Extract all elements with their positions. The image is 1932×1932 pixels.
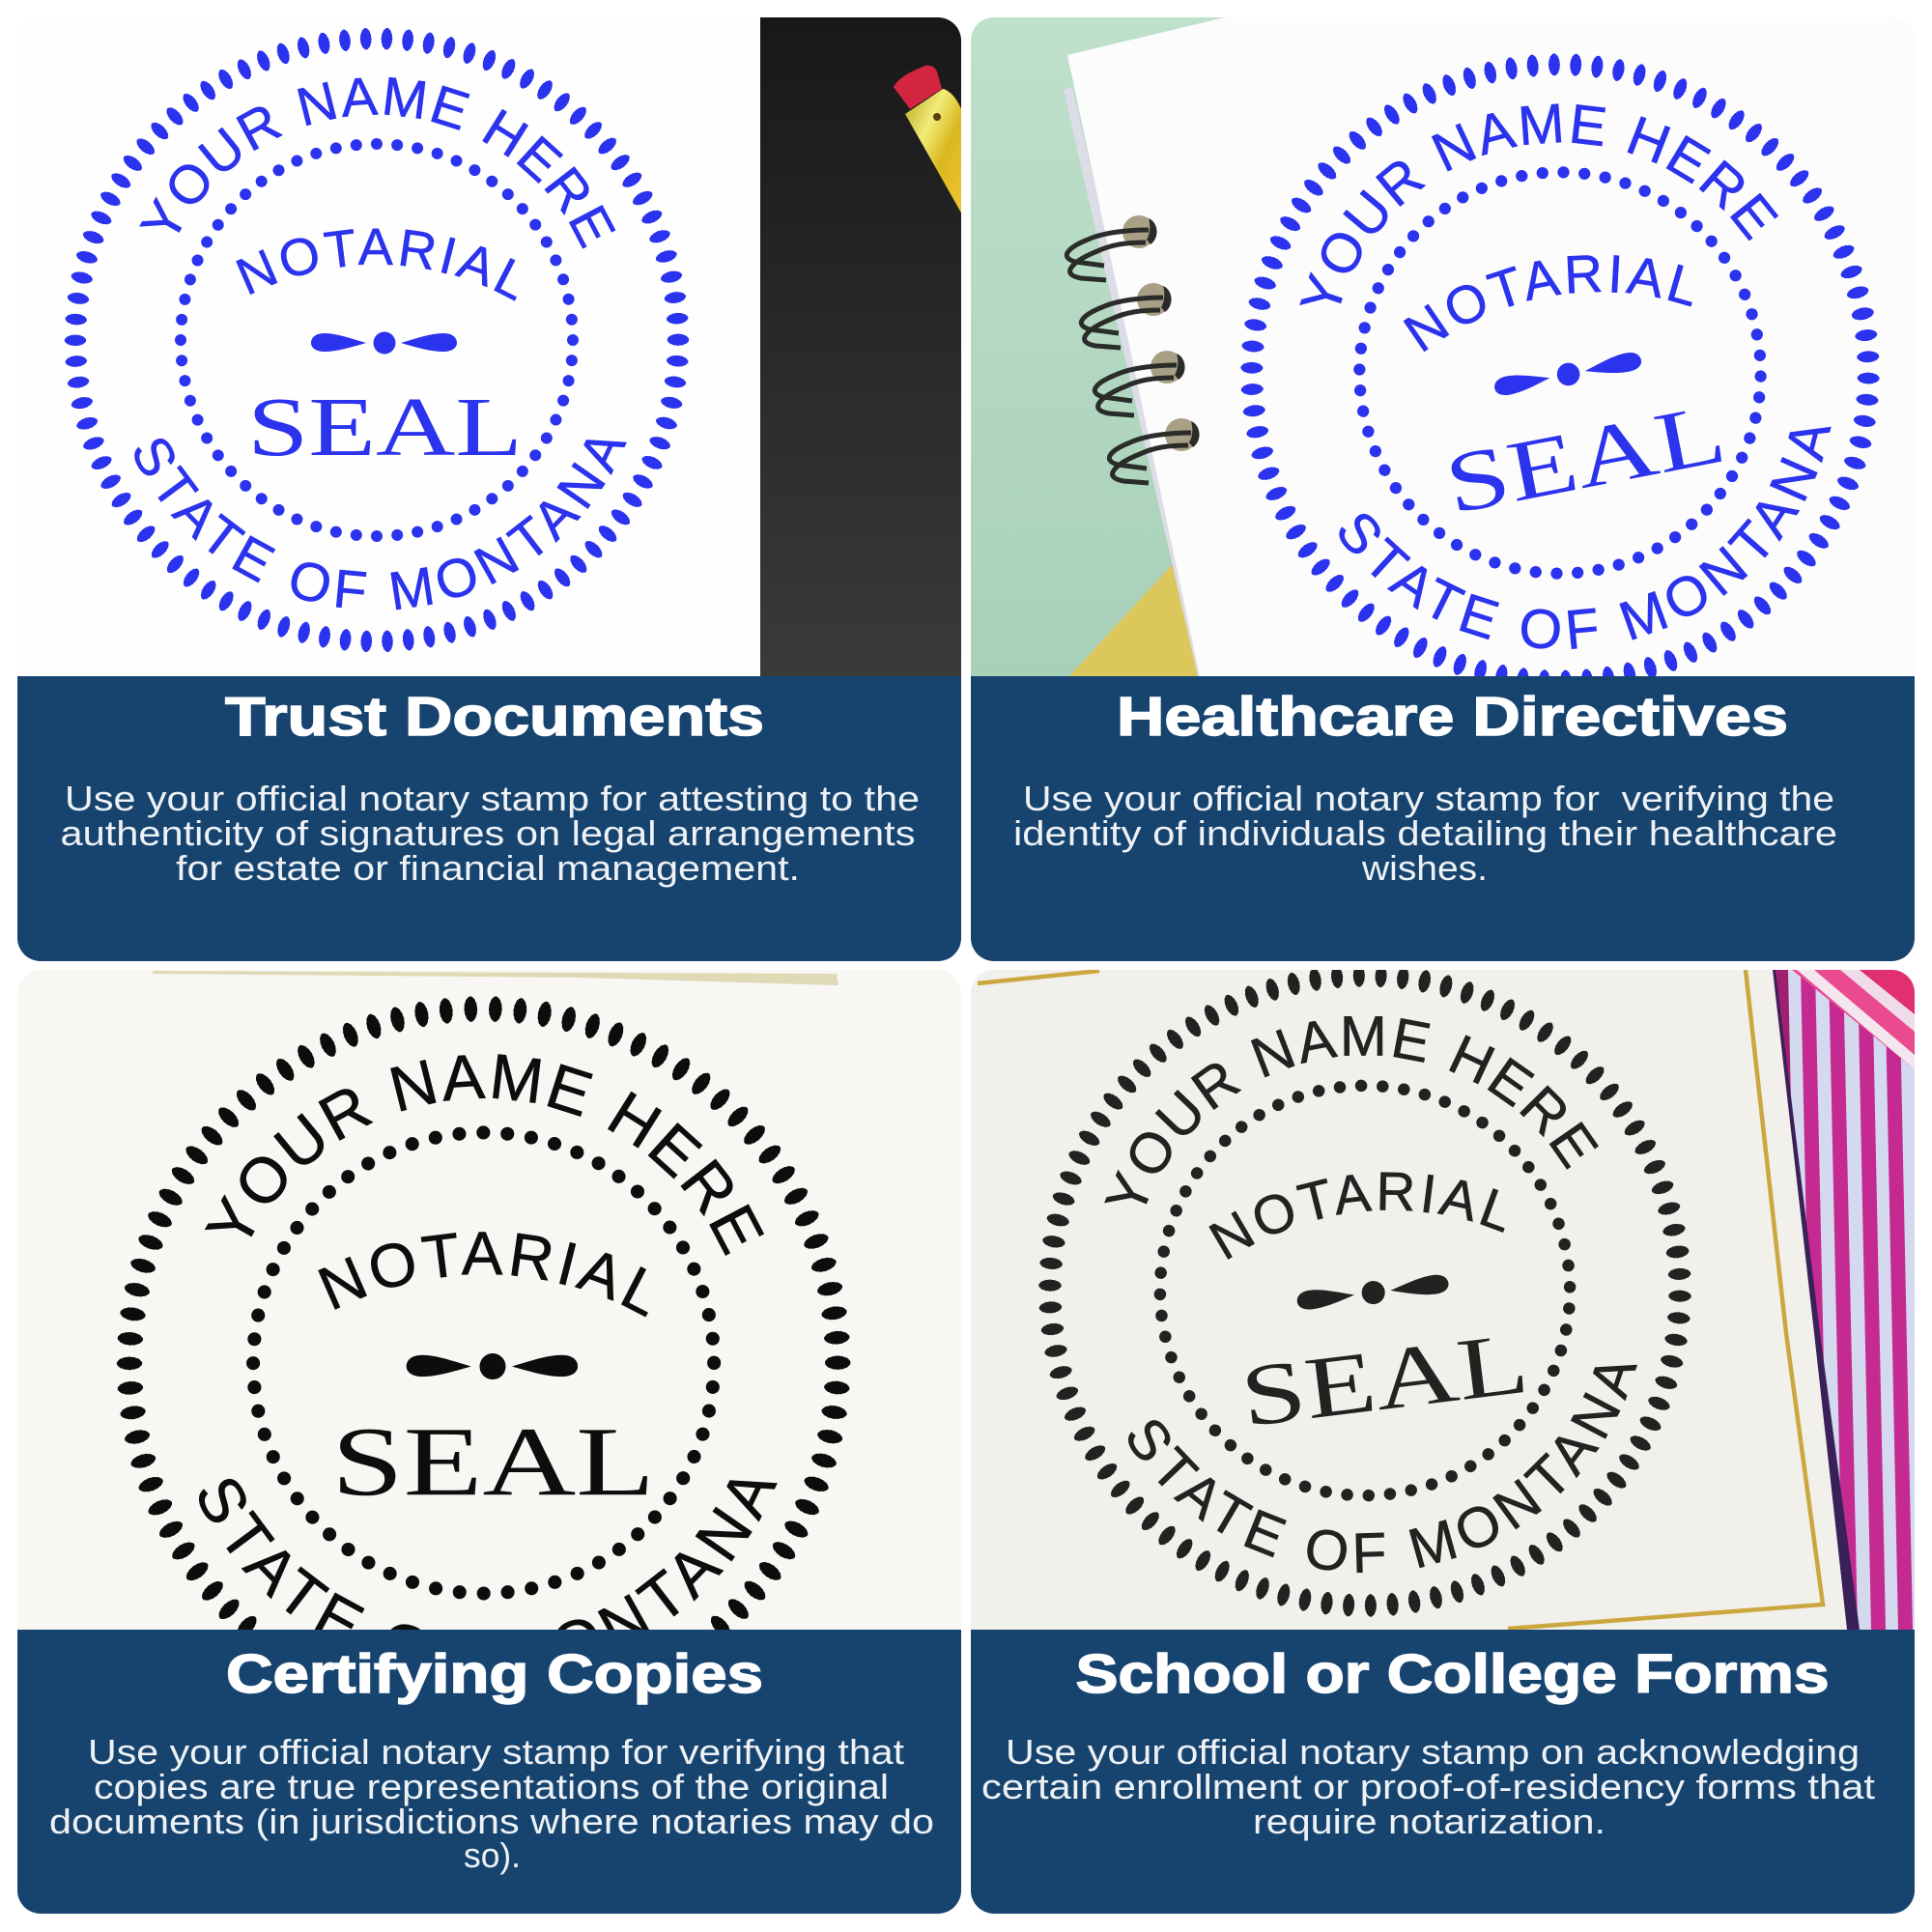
description: identity of individuals detailing their healthcare (1013, 813, 1837, 853)
photo background: striped ribbon (1768, 970, 1915, 1630)
inner ring of round dots (253, 1132, 714, 1594)
description (60, 779, 920, 888)
photo background: white paper (17, 17, 761, 676)
description: for estate or financial management. (176, 848, 800, 888)
outer ring of elongated dots (1005, 930, 1725, 1651)
seal text: your name here: YOUR NAME HERE (139, 77, 616, 249)
seal text: state of montana: STATE OF MONTANA (134, 439, 627, 611)
seal text: notarial: NOTARIAL (318, 1232, 648, 1318)
inner ring of round dots (1353, 166, 1767, 580)
icon: spiral rings (1066, 215, 1200, 483)
panel: Trust Documents (17, 17, 961, 961)
photo background: notebook page (1067, 17, 1915, 676)
ornament (1494, 353, 1642, 396)
seal text: notarial: NOTARIAL (1403, 255, 1692, 352)
seal text: notarial: NOTARIAL (1208, 1172, 1505, 1260)
panel: School or College Forms (971, 970, 1915, 1914)
outer ring of elongated dots (1240, 53, 1880, 676)
seal text: your name here: YOUR NAME HERE (1299, 103, 1779, 305)
seal text: seal: SEAL (1236, 1314, 1533, 1445)
description (49, 1732, 934, 1875)
description: Use your official notary stamp for verifying that (88, 1732, 904, 1772)
caption band (17, 1630, 961, 1914)
description: require notarization. (1253, 1802, 1605, 1841)
seal text: seal: SEAL (331, 1407, 655, 1517)
ornament (407, 1353, 578, 1379)
seal text: your name here: YOUR NAME HERE (1104, 1016, 1599, 1204)
description (981, 1732, 1875, 1841)
heading: Trust Documents (225, 686, 764, 748)
description: authenticity of signatures on legal arrangements (60, 813, 916, 853)
inner ring of round dots (181, 144, 573, 536)
seal text: seal: SEAL (247, 380, 523, 473)
panel: Certifying Copies (17, 970, 961, 1914)
panel: Healthcare Directives (971, 17, 1915, 961)
ornament (1295, 1272, 1450, 1314)
description: Use your official notary stamp on acknowledging (1006, 1732, 1860, 1772)
photo background: card paper (971, 970, 1847, 1630)
outer ring of elongated dots (68, 31, 686, 649)
ornament (311, 332, 457, 354)
seal text: seal: SEAL (1438, 385, 1733, 532)
photo background: mint surface (971, 17, 1915, 676)
seal text: state of montana: STATE OF MONTANA (199, 1478, 778, 1630)
description: wishes. (1361, 848, 1488, 888)
heading: Certifying Copies (226, 1643, 763, 1705)
description: copies are true representations of the original (94, 1767, 889, 1806)
photo background: under sheet (1064, 87, 1208, 676)
outer ring of elongated dots (116, 996, 850, 1630)
heading: Healthcare Directives (1117, 686, 1788, 748)
photo background: dark surface (760, 17, 961, 676)
inner ring of round dots (1137, 1063, 1593, 1519)
photo background: paper strip (153, 971, 838, 985)
stamp seal: black (116, 996, 850, 1630)
caption band (971, 1630, 1915, 1914)
description: Use your official notary stamp for verifying the (1023, 779, 1834, 818)
stamp seal: blue (64, 27, 690, 652)
description (1016, 785, 1835, 881)
stamp seal: dark, rotated (1038, 970, 1691, 1617)
seal text: state of montana: STATE OF MONTANA (1128, 1364, 1637, 1573)
photo background: gold border (978, 970, 1823, 1629)
stamp seal: blue, rotated (1240, 53, 1880, 676)
description: Use your official notary stamp for attesting to the (65, 779, 920, 818)
seal text: notarial: NOTARIAL (236, 228, 517, 301)
photo background: white paper (17, 970, 961, 1630)
seal text: your name here: YOUR NAME HERE (205, 1054, 765, 1256)
heading: School or College Forms (1076, 1643, 1830, 1705)
description: documents (in jurisdictions where notaries may do (49, 1802, 934, 1841)
icon: pencil (894, 66, 962, 214)
caption band (971, 676, 1915, 961)
caption band (17, 676, 961, 961)
photo background: yellow paper (1069, 564, 1208, 676)
description: certain enrollment or proof-of-residency forms that (981, 1767, 1875, 1806)
description: so). (464, 1835, 521, 1875)
seal text: state of montana: STATE OF MONTANA (1339, 427, 1832, 649)
